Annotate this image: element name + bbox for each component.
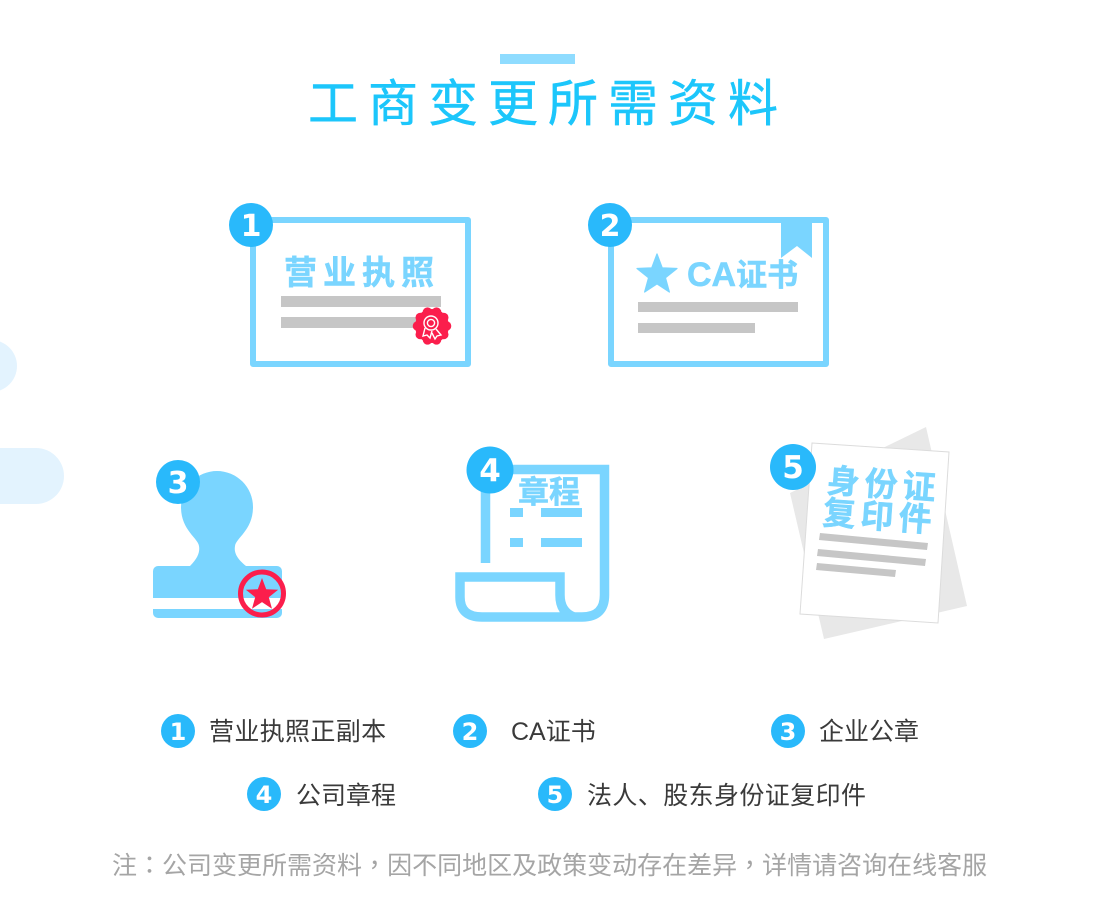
panel: ID copy — [770, 427, 967, 639]
title accent bar — [500, 54, 575, 64]
icon: star — [637, 254, 677, 292]
number badge 5 — [770, 444, 816, 490]
legend item 4: 4 — [256, 781, 272, 809]
legend item 2 — [453, 714, 596, 748]
certificate heading: CA证书 — [687, 256, 798, 294]
icon: scroll outline — [460, 470, 604, 617]
icon: stamp handle — [181, 471, 253, 566]
panel: CA certificate — [588, 203, 826, 364]
number badge 1: 1 — [241, 209, 261, 244]
legend item 1: 1 — [170, 718, 186, 746]
number badge 4: 4 — [479, 453, 501, 489]
number badge 5: 5 — [782, 450, 804, 486]
ID heading: 复印件 — [822, 494, 938, 539]
number badge 1 — [229, 203, 273, 247]
legend item 3: 企业公章 — [819, 718, 919, 746]
panel: articles of association — [460, 446, 604, 617]
legend item 3: 3 — [780, 718, 796, 746]
footnote: 注：公司变更所需资料，因不同地区及政策变动存在差异，详情请咨询在线客服 — [112, 846, 987, 882]
scroll list lines — [510, 508, 582, 547]
number badge 2: 2 — [600, 209, 620, 244]
certificate text lines — [638, 302, 798, 333]
left decorative shapes — [0, 340, 64, 504]
number badge 4 — [466, 446, 514, 494]
legend item 2: CA证书 — [511, 718, 596, 746]
number badge 2 — [588, 203, 632, 247]
ID heading — [822, 462, 942, 539]
icon: stamp base — [153, 566, 282, 618]
license heading: 营业执照 — [284, 254, 440, 291]
back sheet — [790, 427, 967, 639]
legend item 2: 2 — [462, 718, 478, 746]
legend item 4: 公司章程 — [296, 782, 396, 810]
scroll heading: 章程 — [518, 475, 580, 510]
legend item 3 — [771, 714, 919, 748]
number badge 3: 3 — [168, 466, 188, 501]
icon: bookmark — [781, 217, 812, 258]
number badge 3 — [156, 460, 200, 504]
legend item 5: 法人、股东身份证复印件 — [587, 782, 866, 810]
panel: business license — [229, 203, 468, 364]
ID text lines — [816, 533, 928, 577]
license text lines — [281, 296, 441, 328]
icon: red star seal — [240, 572, 284, 615]
legend item 4 — [247, 777, 396, 811]
panel: company seal — [153, 460, 284, 618]
legend item 5: 5 — [547, 781, 563, 809]
ID heading: 身份证 — [826, 462, 942, 507]
title: 工商变更所需资料 — [308, 76, 788, 132]
legend item 1: 营业执照正副本 — [209, 718, 386, 746]
front sheet — [800, 443, 949, 623]
legend item 1 — [161, 714, 386, 748]
icon: red seal badge — [413, 307, 451, 345]
